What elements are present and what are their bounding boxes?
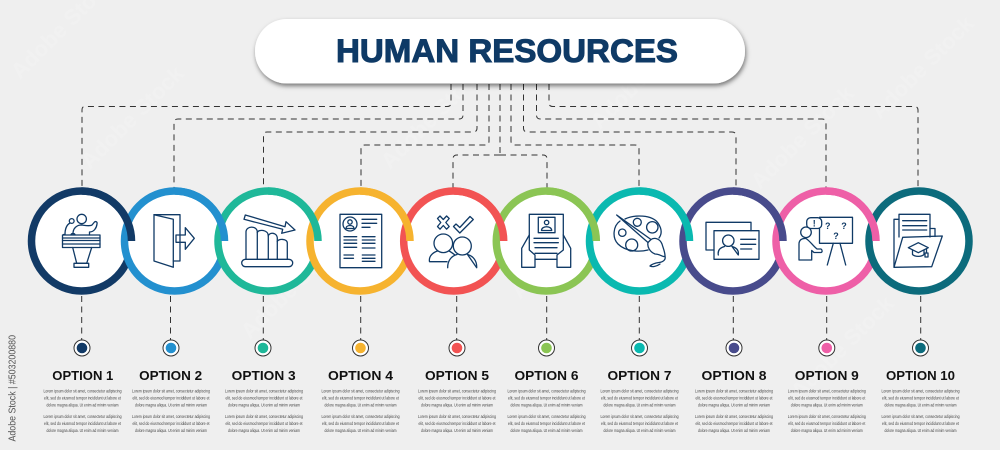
marker xyxy=(538,340,554,356)
description: dolore magna aliqua. Ut enim ad minim veniam xyxy=(421,402,493,408)
description: elit, sed do eiusmod tempor incididunt ut labore et xyxy=(44,421,122,426)
description: Lorem ipsum dolor sit amet, consectetur adipiscing xyxy=(788,414,866,419)
description: dolore magna aliqua. Ut enim ad minim veniam xyxy=(791,428,863,433)
description: dolore magna aliqua. Ut enim ad minim veniam xyxy=(884,428,957,433)
icon: declining bar chart xyxy=(242,215,295,267)
description: Lorem ipsum dolor sit amet, consectetur adipiscing xyxy=(225,414,304,419)
description xyxy=(600,388,679,433)
connector to marker xyxy=(262,296,264,340)
description: Lorem ipsum dolor sit amet, consectetur adipiscing xyxy=(418,388,497,394)
label: OPTION 3 xyxy=(232,368,296,383)
description: elit, sed do eiusmod tempor incididunt ut labore et xyxy=(322,396,400,400)
stock watermarks: Adobe Stock xyxy=(236,230,349,344)
description xyxy=(882,388,960,433)
description xyxy=(788,388,866,433)
description: dolore magna aliqua. Ut enim ad minim veniam xyxy=(228,428,300,433)
stock watermarks: Adobe Stock xyxy=(376,60,489,174)
label: OPTION 9 xyxy=(795,368,859,383)
description: elit, sed do eiusmod tempor incididunt ut labore et xyxy=(418,396,496,400)
label: OPTION 2 xyxy=(139,368,202,383)
description xyxy=(322,388,400,433)
option 5 xyxy=(418,216,497,433)
description: dolore magna aliqua. Ut enim ad minim veniam xyxy=(510,428,583,433)
description: dolore magna aliqua. Ut enim ad minim veniam xyxy=(604,428,676,433)
connector to marker xyxy=(638,296,640,340)
option 10 xyxy=(882,214,960,433)
icon: id cards xyxy=(706,222,759,259)
description: Lorem ipsum dolor sit amet, consectetur adipiscing xyxy=(225,388,304,394)
option 6 xyxy=(508,214,586,433)
description: dolore magna aliqua. Ut enim ad minim veniam xyxy=(510,402,583,408)
label: OPTION 4 xyxy=(328,368,394,383)
description: dolore magna aliqua. Ut enim ad minim veniam xyxy=(324,428,397,433)
connector to marker xyxy=(546,296,548,340)
option 3 xyxy=(225,215,304,433)
icon: paint palette and brush xyxy=(614,215,665,267)
description: Lorem ipsum dolor sit amet, consectetur adipiscing xyxy=(508,414,586,419)
description: Lorem ipsum dolor sit amet, consectetur adipiscing xyxy=(508,388,586,394)
connector to marker xyxy=(456,296,458,340)
connector to marker xyxy=(81,296,83,340)
marker xyxy=(255,340,271,356)
marker xyxy=(819,340,835,356)
description: dolore magna aliqua. Ut enim ad minim veniam xyxy=(698,402,770,408)
whiteboard marks: ! xyxy=(813,218,816,228)
description: elit, sed do eiusmod tempor incididunt ut labore et xyxy=(508,421,586,426)
connector to marker xyxy=(170,296,172,340)
description: elit, sed do eiusmod tempor incididunt ut labore et xyxy=(418,421,496,426)
description xyxy=(418,388,497,433)
stock watermarks: Adobe Stock xyxy=(76,60,189,174)
option 1 xyxy=(44,214,122,433)
title pill: HUMAN RESOURCES xyxy=(336,33,678,69)
description: elit, sed do eiusmod tempor incididunt ut labore et xyxy=(788,421,866,426)
dashed connectors from title to circles xyxy=(82,84,918,188)
description xyxy=(132,388,211,433)
icon: education folder xyxy=(894,214,942,267)
icon: resume document xyxy=(340,214,382,268)
marker xyxy=(912,340,928,356)
whiteboard marks xyxy=(813,218,847,241)
description: dolore magna aliqua. Ut enim ad minim veniam xyxy=(46,428,119,433)
description: dolore magna aliqua. Ut enim ad minim veniam xyxy=(884,402,957,408)
label: OPTION 7 xyxy=(608,368,672,383)
marker xyxy=(632,340,648,356)
description: Lorem ipsum dolor sit amet, consectetur adipiscing xyxy=(882,388,960,394)
label: OPTION 5 xyxy=(425,368,490,383)
description: dolore magna aliqua. Ut enim ad minim veniam xyxy=(421,428,493,433)
description: elit, sed do eiusmod tempor incididunt ut labore et xyxy=(44,396,122,400)
description: Lorem ipsum dolor sit amet, consectetur adipiscing xyxy=(600,414,679,419)
whiteboard marks: ? xyxy=(825,221,830,231)
description: dolore magna aliqua. Ut enim ad minim veniam xyxy=(228,402,300,408)
option 4 xyxy=(322,214,400,433)
marker xyxy=(449,340,465,356)
description: Lorem ipsum dolor sit amet, consectetur adipiscing xyxy=(322,414,400,419)
description: Lorem ipsum dolor sit amet, consectetur adipiscing xyxy=(44,414,122,419)
icon: hands holding resume xyxy=(522,214,571,267)
stock watermarks: Adobe Stock xyxy=(786,290,899,404)
description: dolore magna aliqua. Ut enim ad minim veniam xyxy=(604,402,676,408)
description: Lorem ipsum dolor sit amet, consectetur adipiscing xyxy=(882,414,960,419)
description: elit, sed do eiusmod tempor incididunt ut labore et xyxy=(322,421,400,426)
icon: exit door with arrow xyxy=(154,215,194,267)
stock watermarks: Adobe Stock xyxy=(746,80,859,194)
description: Lorem ipsum dolor sit amet, consectetur adipiscing xyxy=(418,414,497,419)
option 7 xyxy=(600,215,679,433)
description: Lorem ipsum dolor sit amet, consectetur adipiscing xyxy=(600,388,679,394)
connector to marker xyxy=(920,296,922,340)
description: elit, sed do eiusmod tempor incididunt ut labore et xyxy=(788,396,866,400)
description: Lorem ipsum dolor sit amet, consectetur adipiscing xyxy=(695,414,774,419)
description: dolore magna aliqua. Ut enim ad minim veniam xyxy=(46,402,119,408)
description: Lorem ipsum dolor sit amet, consectetur adipiscing xyxy=(695,388,774,394)
option 9 xyxy=(788,217,866,433)
stock watermarks: Adobe Stock xyxy=(506,190,619,304)
interlaced rings xyxy=(32,191,969,291)
title pill xyxy=(255,19,745,84)
description: elit, sed do eiusmod tempor incididunt ut labore et xyxy=(226,396,303,400)
description: elit, sed do eiusmod tempor incididunt ut labore et xyxy=(882,396,960,400)
description: dolore magna aliqua. Ut enim ad minim veniam xyxy=(324,402,397,408)
icon: presenter at whiteboard xyxy=(799,217,852,265)
description: dolore magna aliqua. Ut enim ad minim veniam xyxy=(135,428,207,433)
vertical stock id: Adobe Stock | #503200880 xyxy=(8,335,18,442)
option 8 xyxy=(695,222,774,433)
description: elit, sed do eiusmod tempor incididunt ut labore et xyxy=(882,421,960,426)
connector to marker xyxy=(826,296,828,340)
description: elit, sed do eiusmod tempor incididunt ut labore et xyxy=(132,396,210,400)
description xyxy=(225,388,304,433)
marker xyxy=(163,340,179,356)
description: elit, sed do eiusmod tempor incididunt ut labore et xyxy=(132,421,210,426)
marker xyxy=(74,340,90,356)
description xyxy=(508,388,586,433)
connector to marker xyxy=(360,296,362,340)
connector to marker xyxy=(732,296,734,340)
marker xyxy=(352,340,368,356)
description: Lorem ipsum dolor sit amet, consectetur adipiscing xyxy=(44,388,122,394)
icon: two people with cross and check xyxy=(429,216,477,268)
description: dolore magna aliqua. Ut enim ad minim veniam xyxy=(698,428,770,433)
whiteboard marks: ? xyxy=(841,221,847,231)
description xyxy=(695,388,774,433)
description: Lorem ipsum dolor sit amet, consectetur adipiscing xyxy=(788,388,866,394)
label: OPTION 10 xyxy=(886,368,955,383)
stock watermarks: Adobe Stock xyxy=(866,10,979,124)
whiteboard marks: ? xyxy=(833,231,839,241)
description: Lorem ipsum dolor sit amet, consectetur adipiscing xyxy=(322,388,400,394)
option 2 xyxy=(132,215,211,433)
description: elit, sed do eiusmod tempor incididunt ut labore et xyxy=(601,396,679,400)
description xyxy=(44,388,122,433)
label: OPTION 1 xyxy=(52,368,114,383)
description: elit, sed do eiusmod tempor incididunt ut labore et xyxy=(601,421,679,426)
icon: speaker at podium xyxy=(62,214,100,267)
description: dolore magna aliqua. Ut enim ad minim veniam xyxy=(135,402,207,408)
description: Lorem ipsum dolor sit amet, consectetur adipiscing xyxy=(132,414,211,419)
label: OPTION 6 xyxy=(514,368,578,383)
description: elit, sed do eiusmod tempor incididunt ut labore et xyxy=(696,396,773,400)
description: Lorem ipsum dolor sit amet, consectetur adipiscing xyxy=(132,388,211,394)
marker xyxy=(726,340,742,356)
description: elit, sed do eiusmod tempor incididunt ut labore et xyxy=(696,421,773,426)
description: elit, sed do eiusmod tempor incididunt ut labore et xyxy=(508,396,586,400)
description: dolore magna aliqua. Ut enim ad minim veniam xyxy=(791,402,863,408)
label: OPTION 8 xyxy=(702,368,766,383)
stock watermarks: Adobe Stock xyxy=(586,20,699,134)
description: elit, sed do eiusmod tempor incididunt ut labore et xyxy=(226,421,303,426)
